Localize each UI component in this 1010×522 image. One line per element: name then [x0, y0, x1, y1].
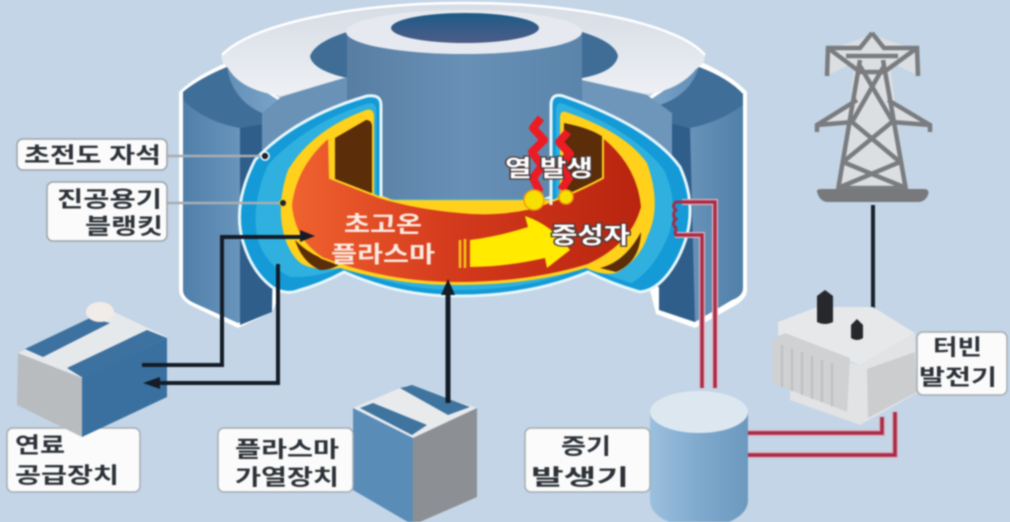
tower base — [817, 189, 928, 202]
label: turbine generator: 터빈 — [933, 335, 982, 360]
fuel stripe back — [25, 318, 110, 357]
callout leader: magnet — [165, 152, 269, 160]
label: fuel supply — [7, 428, 140, 492]
top cap ring — [222, 3, 705, 96]
generator left block — [772, 333, 850, 412]
heat particle large — [524, 190, 544, 210]
steam pipes — [674, 202, 715, 388]
generator right block — [867, 352, 917, 418]
fuel pipes — [142, 230, 315, 389]
fuel cap — [86, 302, 114, 322]
heating unit top — [353, 385, 477, 438]
fuel supply unit — [17, 302, 167, 437]
power line — [871, 205, 875, 310]
generator fins — [782, 345, 832, 406]
heating stripe back — [400, 385, 470, 415]
left upper chamber — [335, 120, 372, 195]
generator body — [790, 333, 917, 425]
yellow blanket layer — [281, 110, 655, 285]
label: vacuum vessel and blanket — [47, 182, 167, 241]
generator top — [778, 307, 915, 365]
fuel unit top — [18, 310, 167, 378]
label: steam generator: 증기 — [561, 434, 611, 459]
left lower chamber — [295, 240, 340, 270]
right upper chamber — [563, 123, 603, 197]
label: vacuum vessel and blanket: 진공용기 — [57, 187, 162, 212]
outer shell — [239, 95, 690, 296]
heating left face — [353, 408, 413, 522]
central cylinder — [347, 32, 582, 218]
right outer magnet wall — [640, 60, 747, 328]
cap top highlight — [222, 3, 705, 55]
steam generator tank — [650, 391, 748, 522]
fuel right face — [82, 338, 167, 437]
tower panels — [820, 35, 928, 190]
tank top — [650, 391, 748, 433]
wall centre line — [550, 110, 552, 205]
neutron label: 중성자 — [551, 222, 630, 248]
bushing small — [851, 319, 863, 340]
plasma — [291, 137, 642, 283]
label: fuel supply: 공급장치 — [15, 463, 119, 488]
inner light blue layer — [256, 103, 673, 290]
label: turbine generator — [917, 332, 1007, 395]
back wall shading — [262, 77, 347, 150]
heating pipe arrow — [441, 279, 455, 403]
label: turbine generator: 발전기 — [919, 365, 997, 390]
fuel stripe front — [67, 330, 167, 378]
heat waves — [532, 118, 570, 192]
plasma heating unit — [353, 385, 477, 522]
arrow head to fuel unit — [143, 377, 160, 389]
tower frame — [817, 33, 930, 190]
reactor body — [179, 3, 747, 328]
label: plasma heating — [218, 428, 353, 492]
turbine pipes — [748, 412, 895, 455]
label: plasma heating: 가열장치 — [235, 465, 339, 490]
arrow tail stripes — [460, 239, 465, 268]
plasma label: 플라스마 — [331, 241, 435, 267]
label: fuel supply: 연료 — [15, 433, 65, 458]
label: superconducting magnet — [17, 139, 167, 170]
label: steam generator — [525, 428, 650, 492]
heat label: 열 발생 — [505, 155, 593, 181]
right lower chamber — [600, 232, 641, 272]
callout leader: vessel — [165, 200, 286, 206]
vacuum vessel cross-section — [239, 95, 690, 296]
left outer magnet wall — [179, 62, 290, 328]
label: steam generator: 발생기 — [531, 465, 629, 490]
neutron arrow — [460, 216, 570, 268]
turbine generator — [772, 290, 917, 425]
label: vacuum vessel and blanket: 블랭킷 — [85, 214, 163, 239]
plasma label — [331, 211, 435, 267]
heating right face — [413, 408, 477, 522]
coil — [674, 202, 682, 235]
back wall shading right — [582, 80, 672, 160]
central hole — [391, 13, 539, 43]
bushing large — [817, 290, 833, 324]
fuel left face — [17, 353, 82, 437]
label: plasma heating: 플라스마 — [235, 437, 339, 462]
heat particle small — [559, 190, 573, 204]
transmission tower — [817, 33, 930, 202]
inner hollow — [310, 32, 618, 78]
heating stripe front — [360, 403, 427, 435]
plasma label: 초고온 — [344, 211, 422, 237]
arrow head to plasma — [300, 230, 315, 242]
label: superconducting magnet: 초전도 자석 — [24, 143, 161, 168]
cylinder top ring — [346, 10, 582, 54]
